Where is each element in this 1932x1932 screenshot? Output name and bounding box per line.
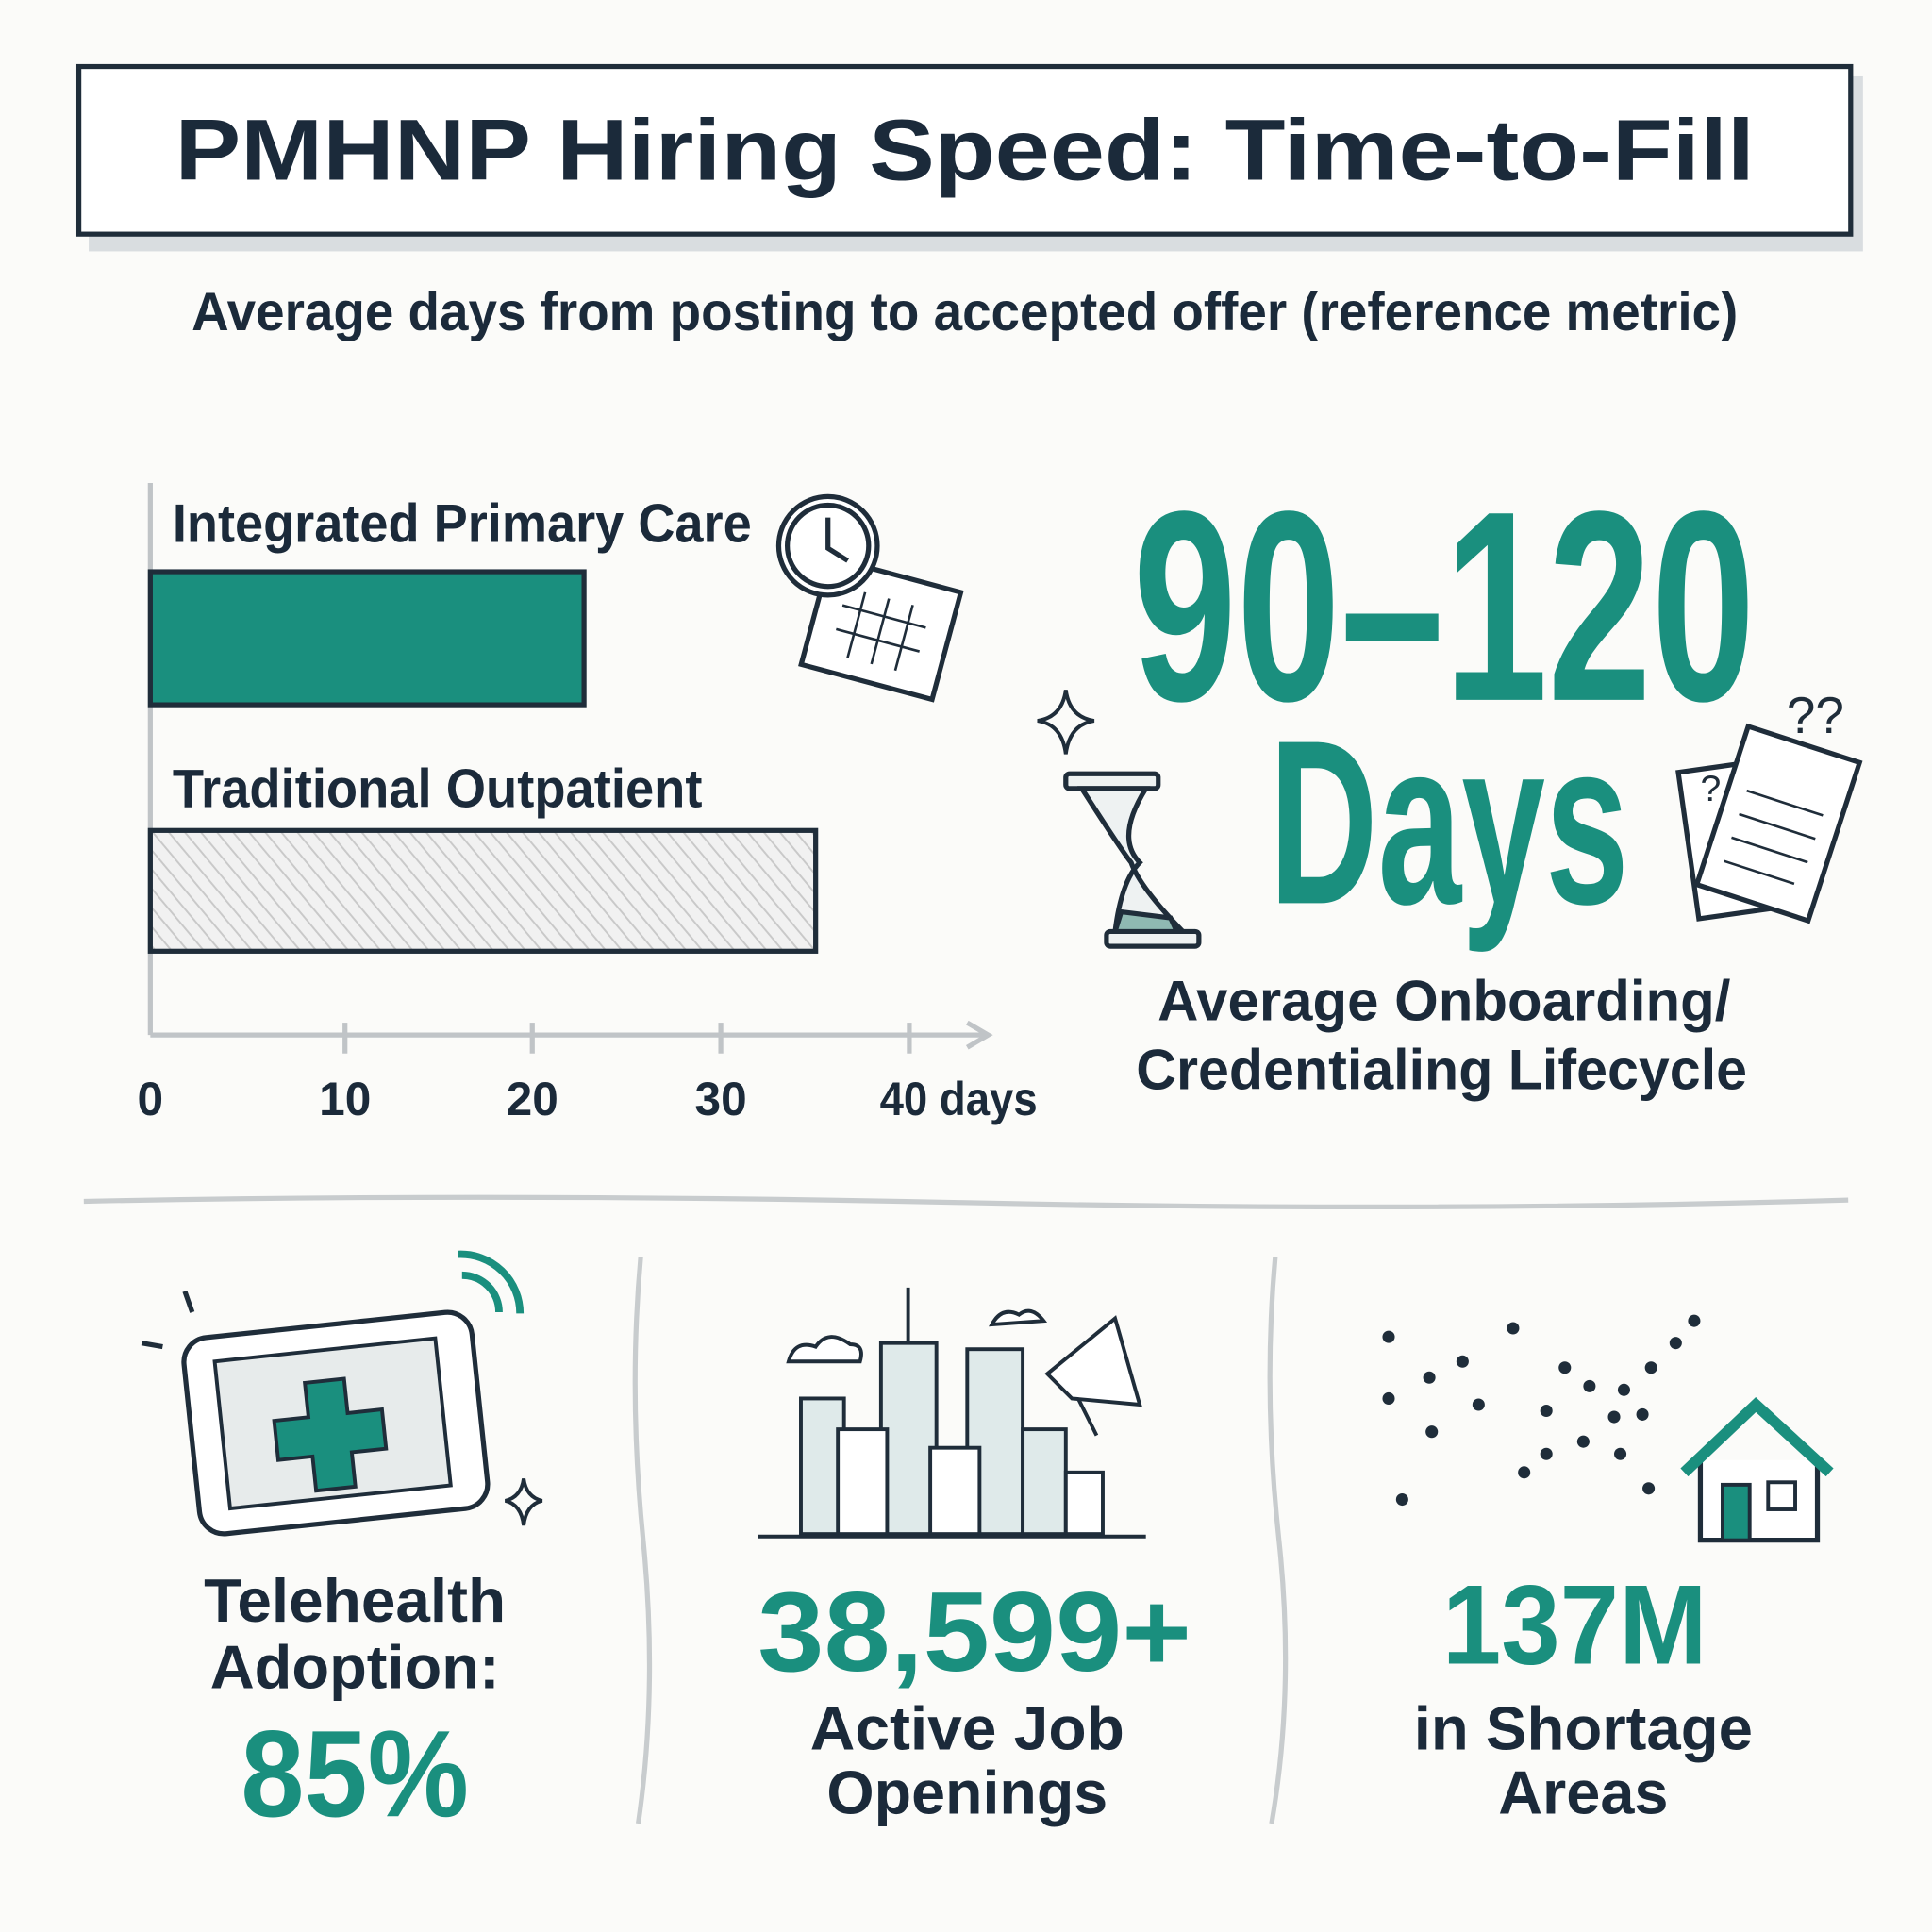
icon: sparkle <box>1038 690 1094 754</box>
bar: traditional <box>150 830 816 951</box>
bar chart: 0 <box>138 1073 163 1125</box>
big number: 90-120 days <box>1133 455 1756 953</box>
icon: city and megaphone <box>758 1288 1146 1537</box>
stat 2: job openings <box>758 1288 1191 1827</box>
caption: onboarding: Credentialing Lifecycle <box>1136 1039 1747 1102</box>
stat 2: job openings: Openings <box>826 1758 1108 1827</box>
stat 2: job openings: 38,599+ <box>758 1569 1191 1695</box>
bar: integrated <box>150 572 584 705</box>
caption: onboarding: Average Onboarding/ <box>1158 969 1731 1032</box>
icon: papers with question marks: ?? <box>1787 686 1844 744</box>
big number: 90-120 days: Days <box>1269 691 1629 953</box>
stat 1: telehealth <box>142 1255 542 1842</box>
title: PMHNP Hiring Speed: Time-to-Fill <box>175 103 1755 199</box>
stat 2: job openings: Active Job <box>810 1694 1124 1763</box>
stat 3: shortage areas: Areas <box>1498 1758 1668 1827</box>
bar chart: 30 <box>694 1073 747 1125</box>
icon: papers with question marks <box>1678 686 1859 921</box>
stat 1: telehealth: 85% <box>241 1705 469 1842</box>
icon: hourglass <box>1066 774 1199 946</box>
subtitle: Average days from posting to accepted offer (reference metric) <box>192 282 1738 342</box>
stat 3: shortage areas <box>1382 1315 1830 1827</box>
icon: papers with question marks: ? <box>1700 769 1721 809</box>
stat 1: telehealth: Adoption: <box>210 1632 500 1701</box>
bar chart: 10 <box>319 1073 371 1125</box>
label: traditional outpatient: Traditional Outpatient <box>173 759 702 820</box>
stat 1: telehealth: Telehealth <box>204 1566 506 1635</box>
title box <box>79 67 1863 251</box>
bar chart: 40 days <box>880 1073 1038 1125</box>
stat 3: shortage areas: in Shortage <box>1414 1694 1753 1763</box>
caption: onboarding <box>1136 969 1747 1102</box>
icon: clock and calendar <box>778 496 960 699</box>
bar chart <box>138 483 1038 1125</box>
icon: dots <box>1382 1315 1700 1506</box>
icon: house <box>1684 1405 1830 1541</box>
icon: tablet <box>142 1255 542 1536</box>
stat 3: shortage areas: 137M <box>1442 1561 1707 1688</box>
label: integrated primary care: Integrated Primary Care <box>173 494 752 555</box>
bar chart: 20 <box>507 1073 558 1125</box>
